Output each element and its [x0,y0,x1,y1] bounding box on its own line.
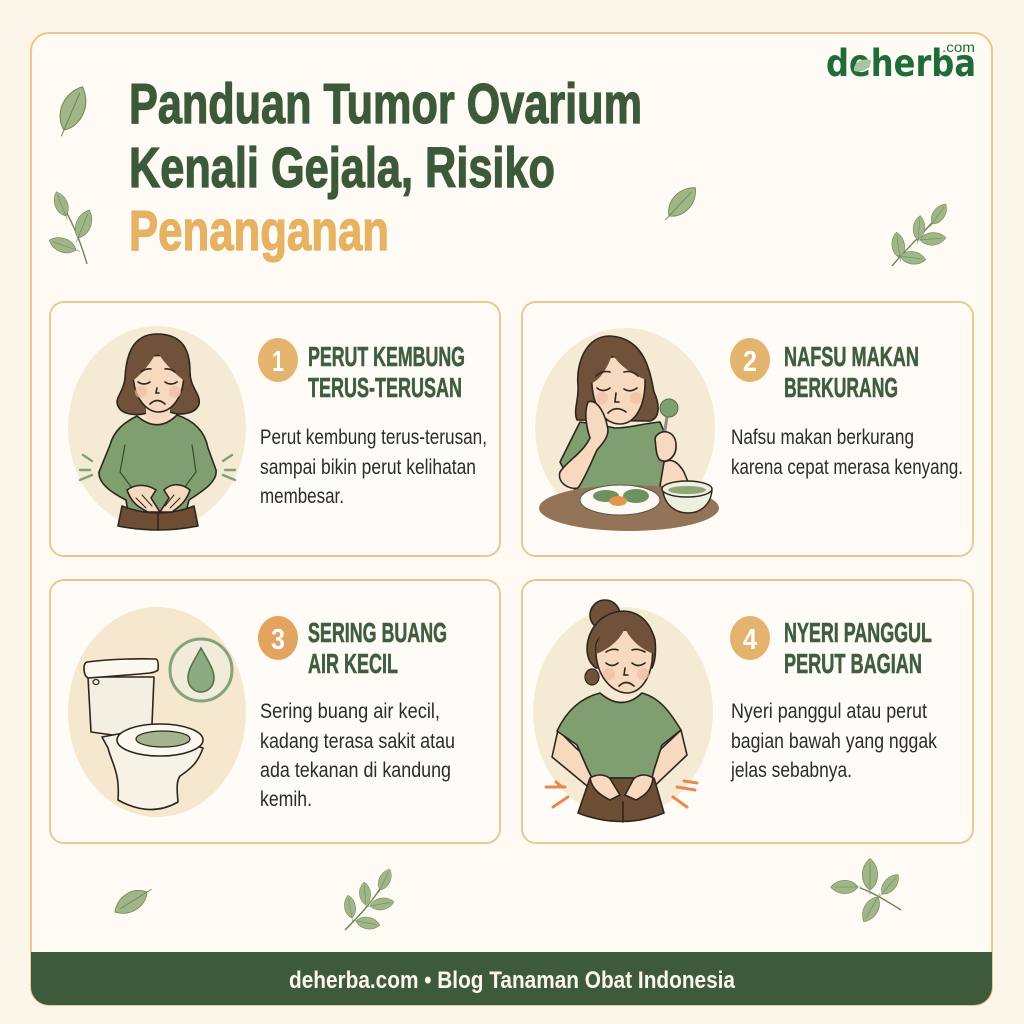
body text 2: Nafsu makan berkurang [731,426,914,449]
body text 2: karena cepat merasa kenyang. [731,456,963,479]
body text 3: Sering buang air kecil, [260,700,440,723]
decorative leaf: top left [51,82,93,141]
number badge 4: 4 [743,624,757,656]
decorative leaf: top centre [658,181,702,226]
body text 4: bagian bawah yang nggak [731,730,937,753]
heading 1 [308,341,465,403]
number badge 2: 2 [743,346,757,378]
number badge 2 [730,338,770,382]
heading 4: PERUT BAGIAN [784,648,922,679]
body text 1: sampai bikin perut kelihatan [260,456,476,479]
title: Penanganan [129,199,389,263]
title [129,72,642,263]
panel: symptom 4 [522,580,973,843]
number badge 3 [258,616,298,660]
number badge 3: 3 [271,624,285,656]
number badge 1 [258,338,298,382]
body text 4: jelas sebabnya. [730,759,852,782]
heading 2: NAFSU MAKAN [784,341,919,372]
decorative sprig: bottom right [831,858,903,925]
panel: symptom 3 [50,580,500,843]
illustration: woman with no appetite at table [535,328,719,531]
decorative leaf: bottom left [110,881,156,920]
heading 3: SERING BUANG [308,617,447,648]
body text 4: Nyeri panggul atau perut [731,700,927,723]
illustration: woman with bloated stomach [68,326,246,530]
heading 4: NYERI PANGGUL [784,617,932,648]
heading 3 [308,617,447,679]
title: Panduan Tumor Ovarium [129,72,642,136]
heading 3: AIR KECIL [308,648,398,679]
panel: symptom 2 [522,302,973,556]
illustration: woman with pelvic pain [533,600,713,822]
footer bar [31,952,992,1005]
body text 4 [730,700,937,782]
body text 1: Perut kembung terus-terusan, [260,426,487,449]
heading 2: BERKURANG [784,372,898,403]
decorative sprig: right [890,201,951,266]
decorative sprig: bottom centre [343,867,395,931]
body text 1: membesar. [260,485,344,508]
number badge 1: 1 [272,346,284,378]
body text 3: ada tekanan di kandung [260,759,451,782]
body text 3 [260,700,455,811]
body text 2 [731,426,963,479]
heading 1: PERUT KEMBUNG [308,341,465,372]
illustration: toilet with water drop [68,607,246,817]
number badge 4 [730,616,770,660]
logo: deherba.com: deherba [826,42,976,85]
heading 2 [784,341,919,403]
body text 3: kemih. [260,788,312,811]
footer bar: deherba.com • Blog Tanaman Obat Indonesia [289,967,736,994]
body text 3: kadang terasa sakit atau [260,730,455,753]
heading 4 [784,617,932,679]
heading 1: TERUS-TERUSAN [308,372,462,403]
decorative sprig: left [47,190,96,264]
body text 1 [260,426,487,508]
title: Kenali Gejala, Risiko [129,136,555,200]
panel: symptom 1 [50,302,500,556]
logo: deherba.com: .com [942,39,975,55]
